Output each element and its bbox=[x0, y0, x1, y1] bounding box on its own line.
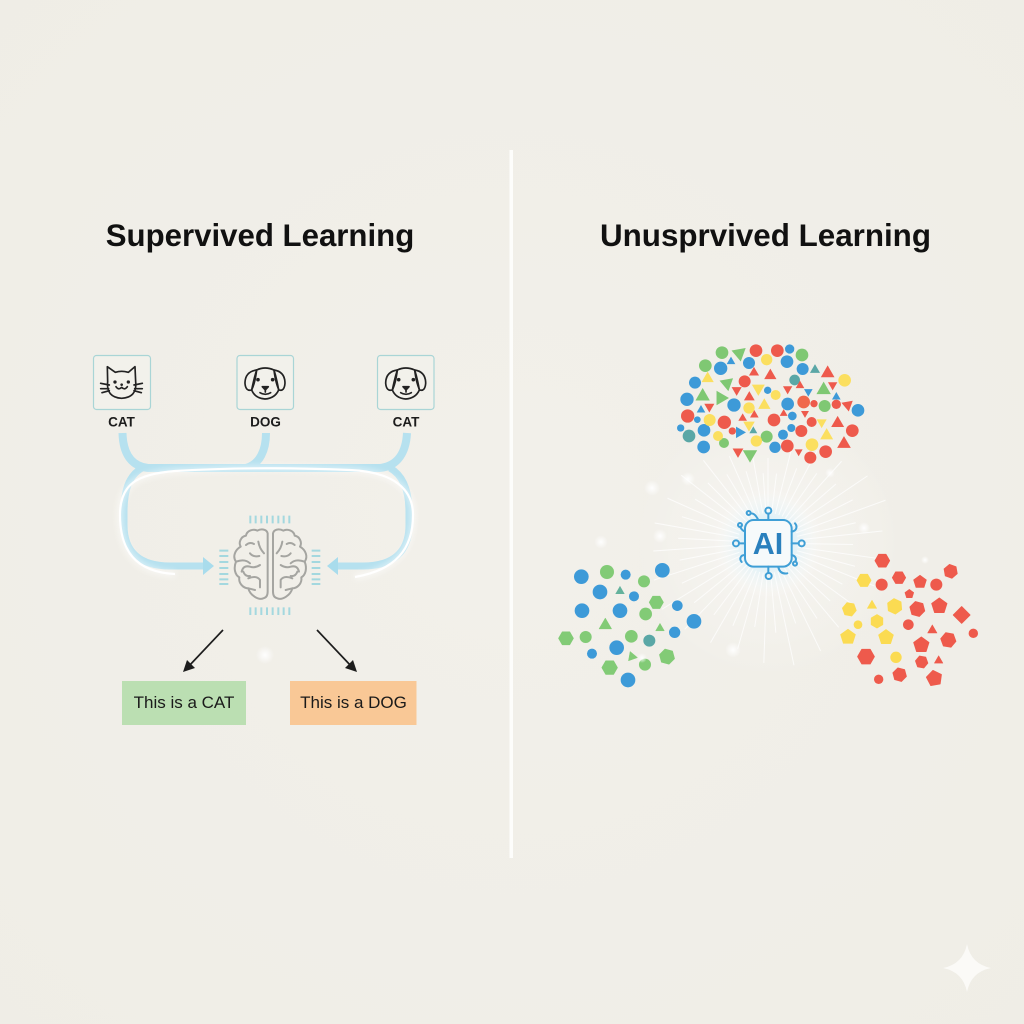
result box: dog bbox=[290, 681, 416, 725]
arrow: right into brain bbox=[327, 557, 338, 575]
input card: dog labelled cat bbox=[378, 356, 434, 410]
result box: cat: This is a CAT bbox=[134, 693, 234, 712]
input card: dog bbox=[237, 356, 294, 410]
result box: dog: This is a DOG bbox=[300, 693, 407, 712]
input card: cat bbox=[94, 356, 150, 410]
panel: unsupervised learning diagram bbox=[256, 344, 978, 687]
label: dog: DOG bbox=[250, 414, 281, 430]
label: ai: AI bbox=[753, 527, 783, 561]
icon: brain bbox=[219, 516, 320, 615]
panel: supervised learning diagram bbox=[94, 356, 434, 725]
center divider bbox=[510, 150, 513, 858]
arrow: left into brain bbox=[203, 557, 214, 575]
mixed data cluster bbox=[677, 344, 864, 464]
icon: dog bbox=[245, 368, 285, 399]
arrow: to cat result bbox=[183, 630, 223, 672]
watermark sparkle bbox=[943, 944, 991, 992]
ai glow and rays bbox=[633, 408, 903, 678]
label: cat: CAT bbox=[108, 414, 136, 430]
cluster: blue and green bbox=[559, 563, 701, 687]
icon: cat bbox=[101, 367, 142, 398]
flow pipes bbox=[122, 433, 409, 566]
icon: dog bbox=[386, 368, 426, 399]
title: supervised: Supervived Learning bbox=[106, 218, 414, 253]
icon: ai chip bbox=[733, 508, 805, 579]
label: cat: CAT bbox=[393, 414, 420, 430]
title: unsupervised: Unusprvived Learning bbox=[600, 218, 931, 253]
glowing loop bbox=[120, 468, 413, 577]
arrow: to dog result bbox=[317, 630, 357, 672]
cluster: red and yellow bbox=[841, 554, 978, 686]
glow sparkles bbox=[256, 468, 929, 664]
result box: cat bbox=[122, 681, 246, 725]
